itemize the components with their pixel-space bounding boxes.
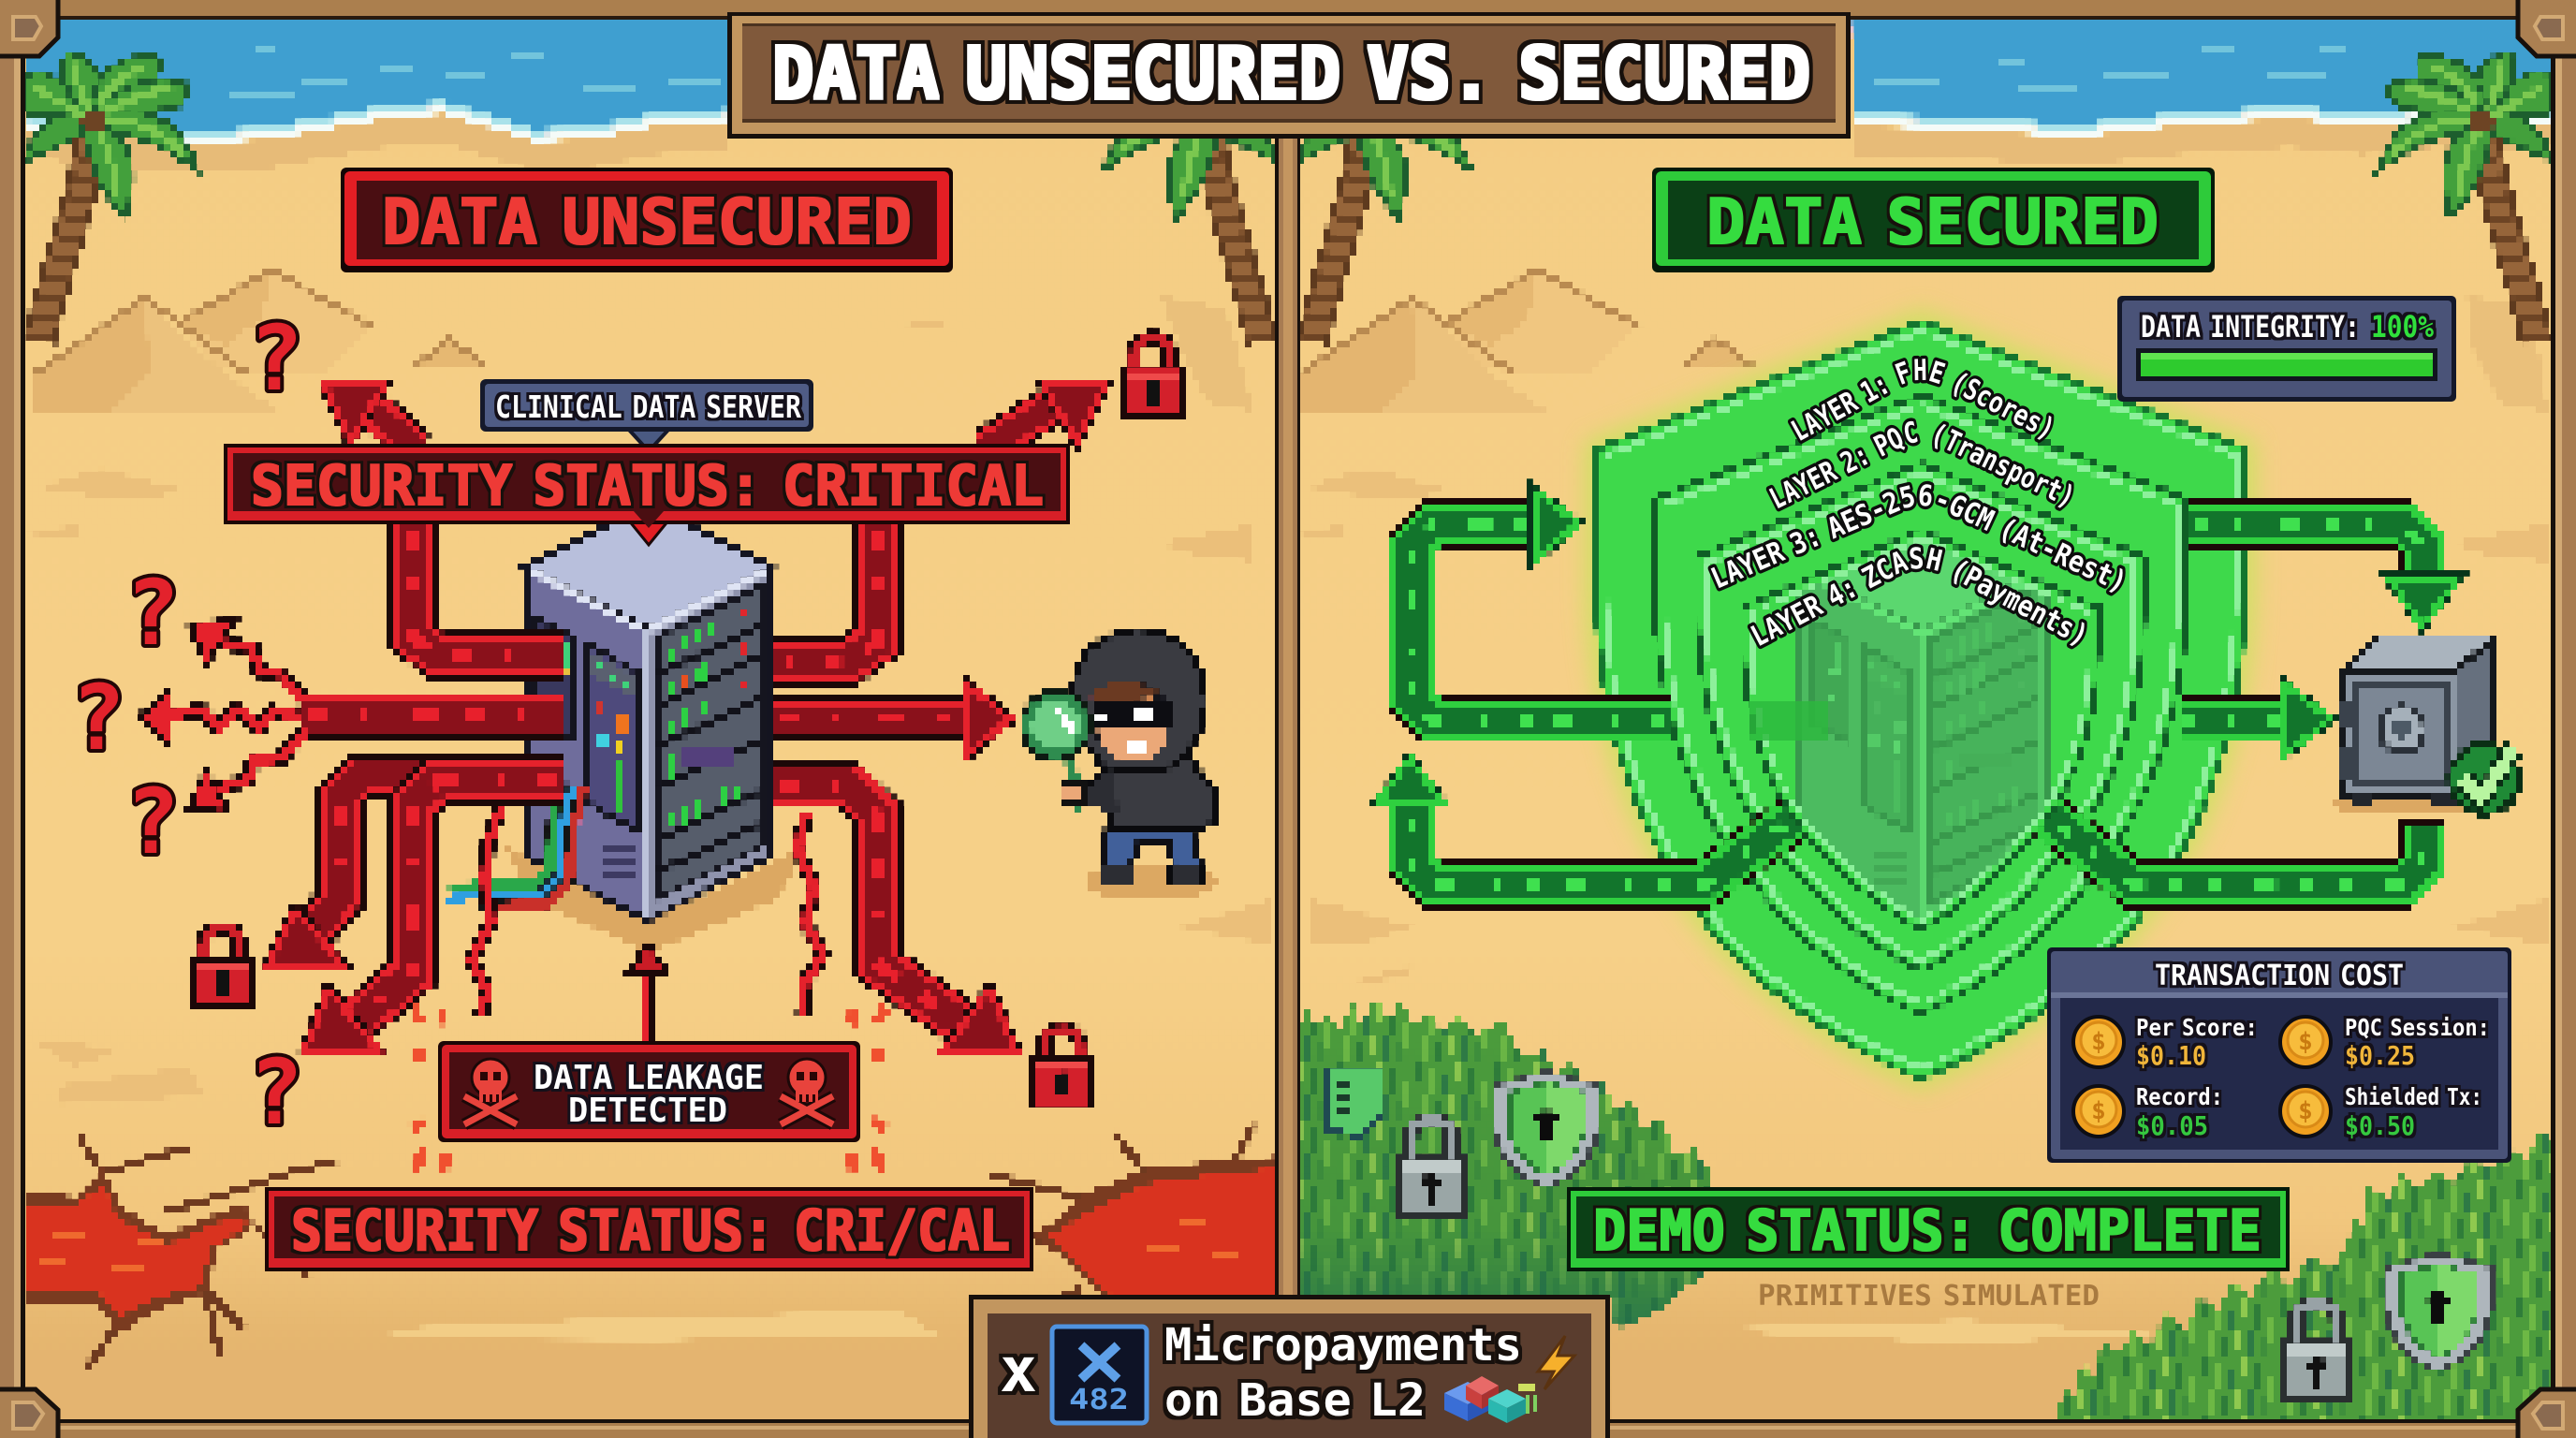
icon: grey padlock xyxy=(1398,1120,1465,1217)
coin: record xyxy=(2073,1083,2223,1141)
badge text: on Base L2 xyxy=(1164,1374,1426,1427)
heading: data secured: DATA SECURED xyxy=(1706,185,2159,258)
icon: skull right xyxy=(781,1059,833,1124)
leak drips xyxy=(473,806,822,1017)
icon: skull left xyxy=(464,1059,517,1124)
red padlocks xyxy=(193,338,1181,1107)
banner: security status critical: SECURITY STATUS: CRITICAL xyxy=(251,453,1044,518)
question marks: ? xyxy=(125,561,180,666)
coin: per score: Per Score: xyxy=(2136,1014,2258,1041)
icon: cubes xyxy=(1444,1376,1537,1423)
hacker character xyxy=(1022,629,1217,901)
coin: record: $ xyxy=(2091,1097,2106,1125)
coin: shielded tx: $ xyxy=(2298,1097,2313,1125)
alert text: DATA LEAKAGE xyxy=(534,1059,764,1097)
data cables xyxy=(446,782,584,906)
shield layer labels xyxy=(1707,356,2126,650)
icon: shield right xyxy=(2386,1254,2491,1372)
coin: pqc session: $ xyxy=(2298,1028,2313,1056)
coin: pqc session: PQC Session: xyxy=(2345,1014,2490,1041)
heading: data unsecured xyxy=(341,168,953,272)
alert sparks xyxy=(412,1006,886,1170)
caption: primitives simulated: PRIMITIVES SIMULATED xyxy=(1758,1280,2100,1313)
alert text: DETECTED xyxy=(568,1092,727,1130)
icon: grey padlock right xyxy=(2283,1303,2350,1401)
icon: lightning xyxy=(1538,1336,1574,1389)
badge text: Micropayments xyxy=(1164,1319,1522,1372)
question marks: ? xyxy=(249,306,303,411)
question marks: ? xyxy=(249,1040,303,1145)
question marks: ? xyxy=(71,666,125,770)
panel: transaction cost xyxy=(2047,947,2511,1163)
banner: security status cracked: SECURITY STATUS: CRI/CAL xyxy=(291,1198,1010,1264)
server shadow xyxy=(505,847,805,953)
heading: data unsecured: DATA UNSECURED xyxy=(382,185,912,258)
center divider xyxy=(1275,135,1300,1301)
title text: DATA UNSECURED VS. SECURED xyxy=(772,33,1810,116)
icon: document xyxy=(1327,1069,1383,1137)
icon: x402 logo: 482 xyxy=(1069,1384,1129,1416)
data integrity meter xyxy=(2117,296,2456,402)
banner: demo status complete: DEMO STATUS: COMPLETE xyxy=(1593,1198,2261,1264)
grass security icons xyxy=(1327,1069,2491,1401)
callout: clinical data server xyxy=(480,379,813,451)
coin: per score: $0.10 xyxy=(2136,1040,2206,1071)
coin: per score xyxy=(2073,1014,2258,1071)
red arrow heads xyxy=(270,384,1105,1050)
icon: x402 logo xyxy=(1052,1327,1147,1423)
panel: data unsecured artwork xyxy=(139,338,1217,1170)
ocean water xyxy=(26,19,2553,158)
red leak pipes xyxy=(300,403,1058,1025)
coin: pqc session: $0.25 xyxy=(2345,1040,2415,1071)
lava cracks xyxy=(24,1123,1277,1372)
panel: data secured artwork xyxy=(1324,303,2523,1402)
coin: shielded tx xyxy=(2280,1083,2482,1141)
shield glow xyxy=(1594,318,2247,1081)
server rack xyxy=(526,506,770,920)
layer 1 label: LAYER 1: FHE (Scores) xyxy=(1788,356,2054,444)
badge text xyxy=(1164,1319,1522,1427)
data integrity meter: 100% xyxy=(2371,309,2435,345)
heading: data secured xyxy=(1652,168,2215,272)
layered shield xyxy=(1594,318,2247,1081)
grass: left clump xyxy=(1300,994,1715,1329)
banner: security status critical xyxy=(224,444,1070,545)
badge: x402 micropayments xyxy=(969,1295,1610,1438)
coin: shielded tx: Shielded Tx: xyxy=(2345,1083,2482,1110)
layer 4 label: LAYER 4: ZCASH (Payments) xyxy=(1747,543,2087,650)
safe with check xyxy=(2331,636,2519,814)
layer 2 label: LAYER 2: PQC (Transport) xyxy=(1765,418,2074,511)
title plaque xyxy=(727,12,1851,139)
icon: shield xyxy=(1494,1072,1599,1188)
alert: data leakage detected xyxy=(438,1041,860,1142)
panel: transaction cost: TRANSACTION COST xyxy=(2155,960,2404,992)
data integrity meter: DATA INTEGRITY: xyxy=(2141,309,2360,345)
question marks xyxy=(71,306,303,1145)
layer 3 label: LAYER 3: AES-256-GCM (At-Rest) xyxy=(1707,481,2126,595)
coin: shielded tx: $0.50 xyxy=(2345,1110,2415,1141)
x glyph: x xyxy=(1000,1334,1037,1406)
coin: per score: $ xyxy=(2091,1028,2106,1056)
grass: right clump xyxy=(2056,1128,2553,1420)
jagged forks to question marks xyxy=(139,620,306,813)
palm trees xyxy=(22,52,2554,342)
green flow arrows xyxy=(1377,491,2458,885)
alert text xyxy=(534,1059,764,1130)
callout: clinical data server: CLINICAL DATA SERVER xyxy=(495,389,801,425)
sand dunes xyxy=(24,270,2548,1420)
coin: pqc session xyxy=(2280,1014,2490,1071)
coin: record: $0.05 xyxy=(2136,1110,2208,1141)
question marks: ? xyxy=(125,770,180,874)
coin: record: Record: xyxy=(2136,1083,2223,1110)
up arrow from alert xyxy=(628,943,667,1039)
